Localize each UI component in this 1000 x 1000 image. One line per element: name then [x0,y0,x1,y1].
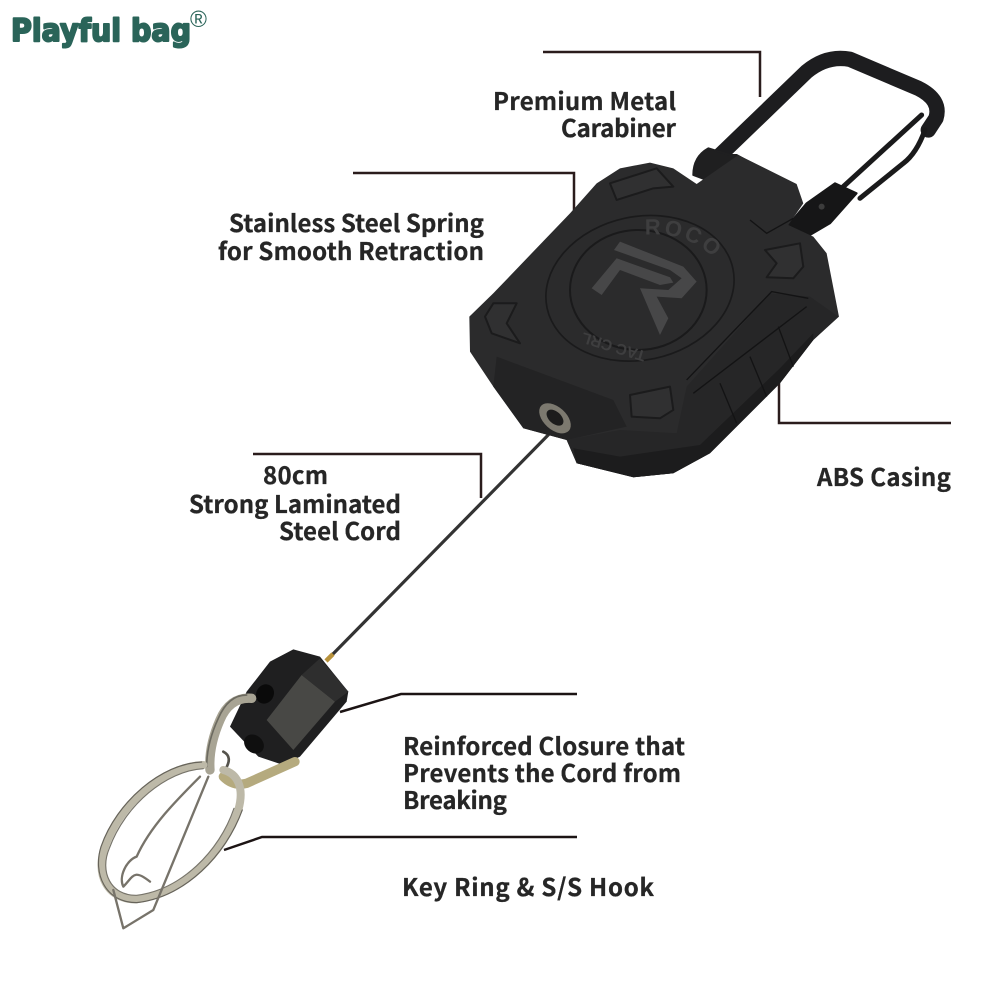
label: steel cord: 80cm [263,456,328,491]
brand logo: ® [190,6,207,32]
label: steel cord [189,456,401,547]
label: stainless steel spring: Stainless Steel Spring [229,204,484,239]
label: key ring and hook: Key Ring & S/S Hook [402,868,654,903]
label: steel cord: Strong Laminated [189,485,401,520]
label: stainless steel spring [218,204,484,267]
cord closure block [230,649,348,765]
casing body [469,155,839,477]
leader line: spring [353,173,574,212]
label: premium metal carabiner [493,82,677,144]
raised corners [485,168,803,418]
label: reinforced closure: Breaking [403,781,507,816]
label: reinforced closure [403,727,685,816]
leader line: carabiner [543,52,760,97]
leader line: cord [253,454,481,498]
label: steel cord: Steel Cord [279,512,401,547]
block holes [252,681,277,707]
logo R mark [592,242,697,335]
block facet [267,675,335,750]
big split ring [101,765,241,899]
split connector ring [210,698,252,770]
cord eyelet [534,397,576,439]
logo text [580,219,720,364]
label: stainless steel spring: for Smooth Retraction [218,232,484,267]
label: reinforced closure: Reinforced Closure that [403,727,685,762]
brand logo: Playful bag [11,13,191,49]
label: reinforced closure: Prevents the Cord from [403,754,681,789]
front face [493,357,627,440]
logo rings [532,198,748,378]
logo text: TAC CRL [580,328,648,364]
side ribs [687,218,808,423]
label: premium metal carabiner: Premium Metal [493,82,676,117]
leader line: key ring [224,837,577,850]
leader line: closure [340,694,577,712]
label: ABS casing: ABS Casing [816,458,951,493]
key ring and hook [98,695,295,928]
hook wires [113,777,208,928]
D-link [223,762,295,784]
label: premium metal carabiner: Carabiner [561,109,677,144]
steel cord [326,425,558,661]
side face [567,293,838,477]
carabiner [693,58,937,235]
leader line: casing [779,358,951,423]
lower shadow band [573,333,813,477]
logo text: ROCO [646,219,720,254]
retractor casing [469,155,839,478]
